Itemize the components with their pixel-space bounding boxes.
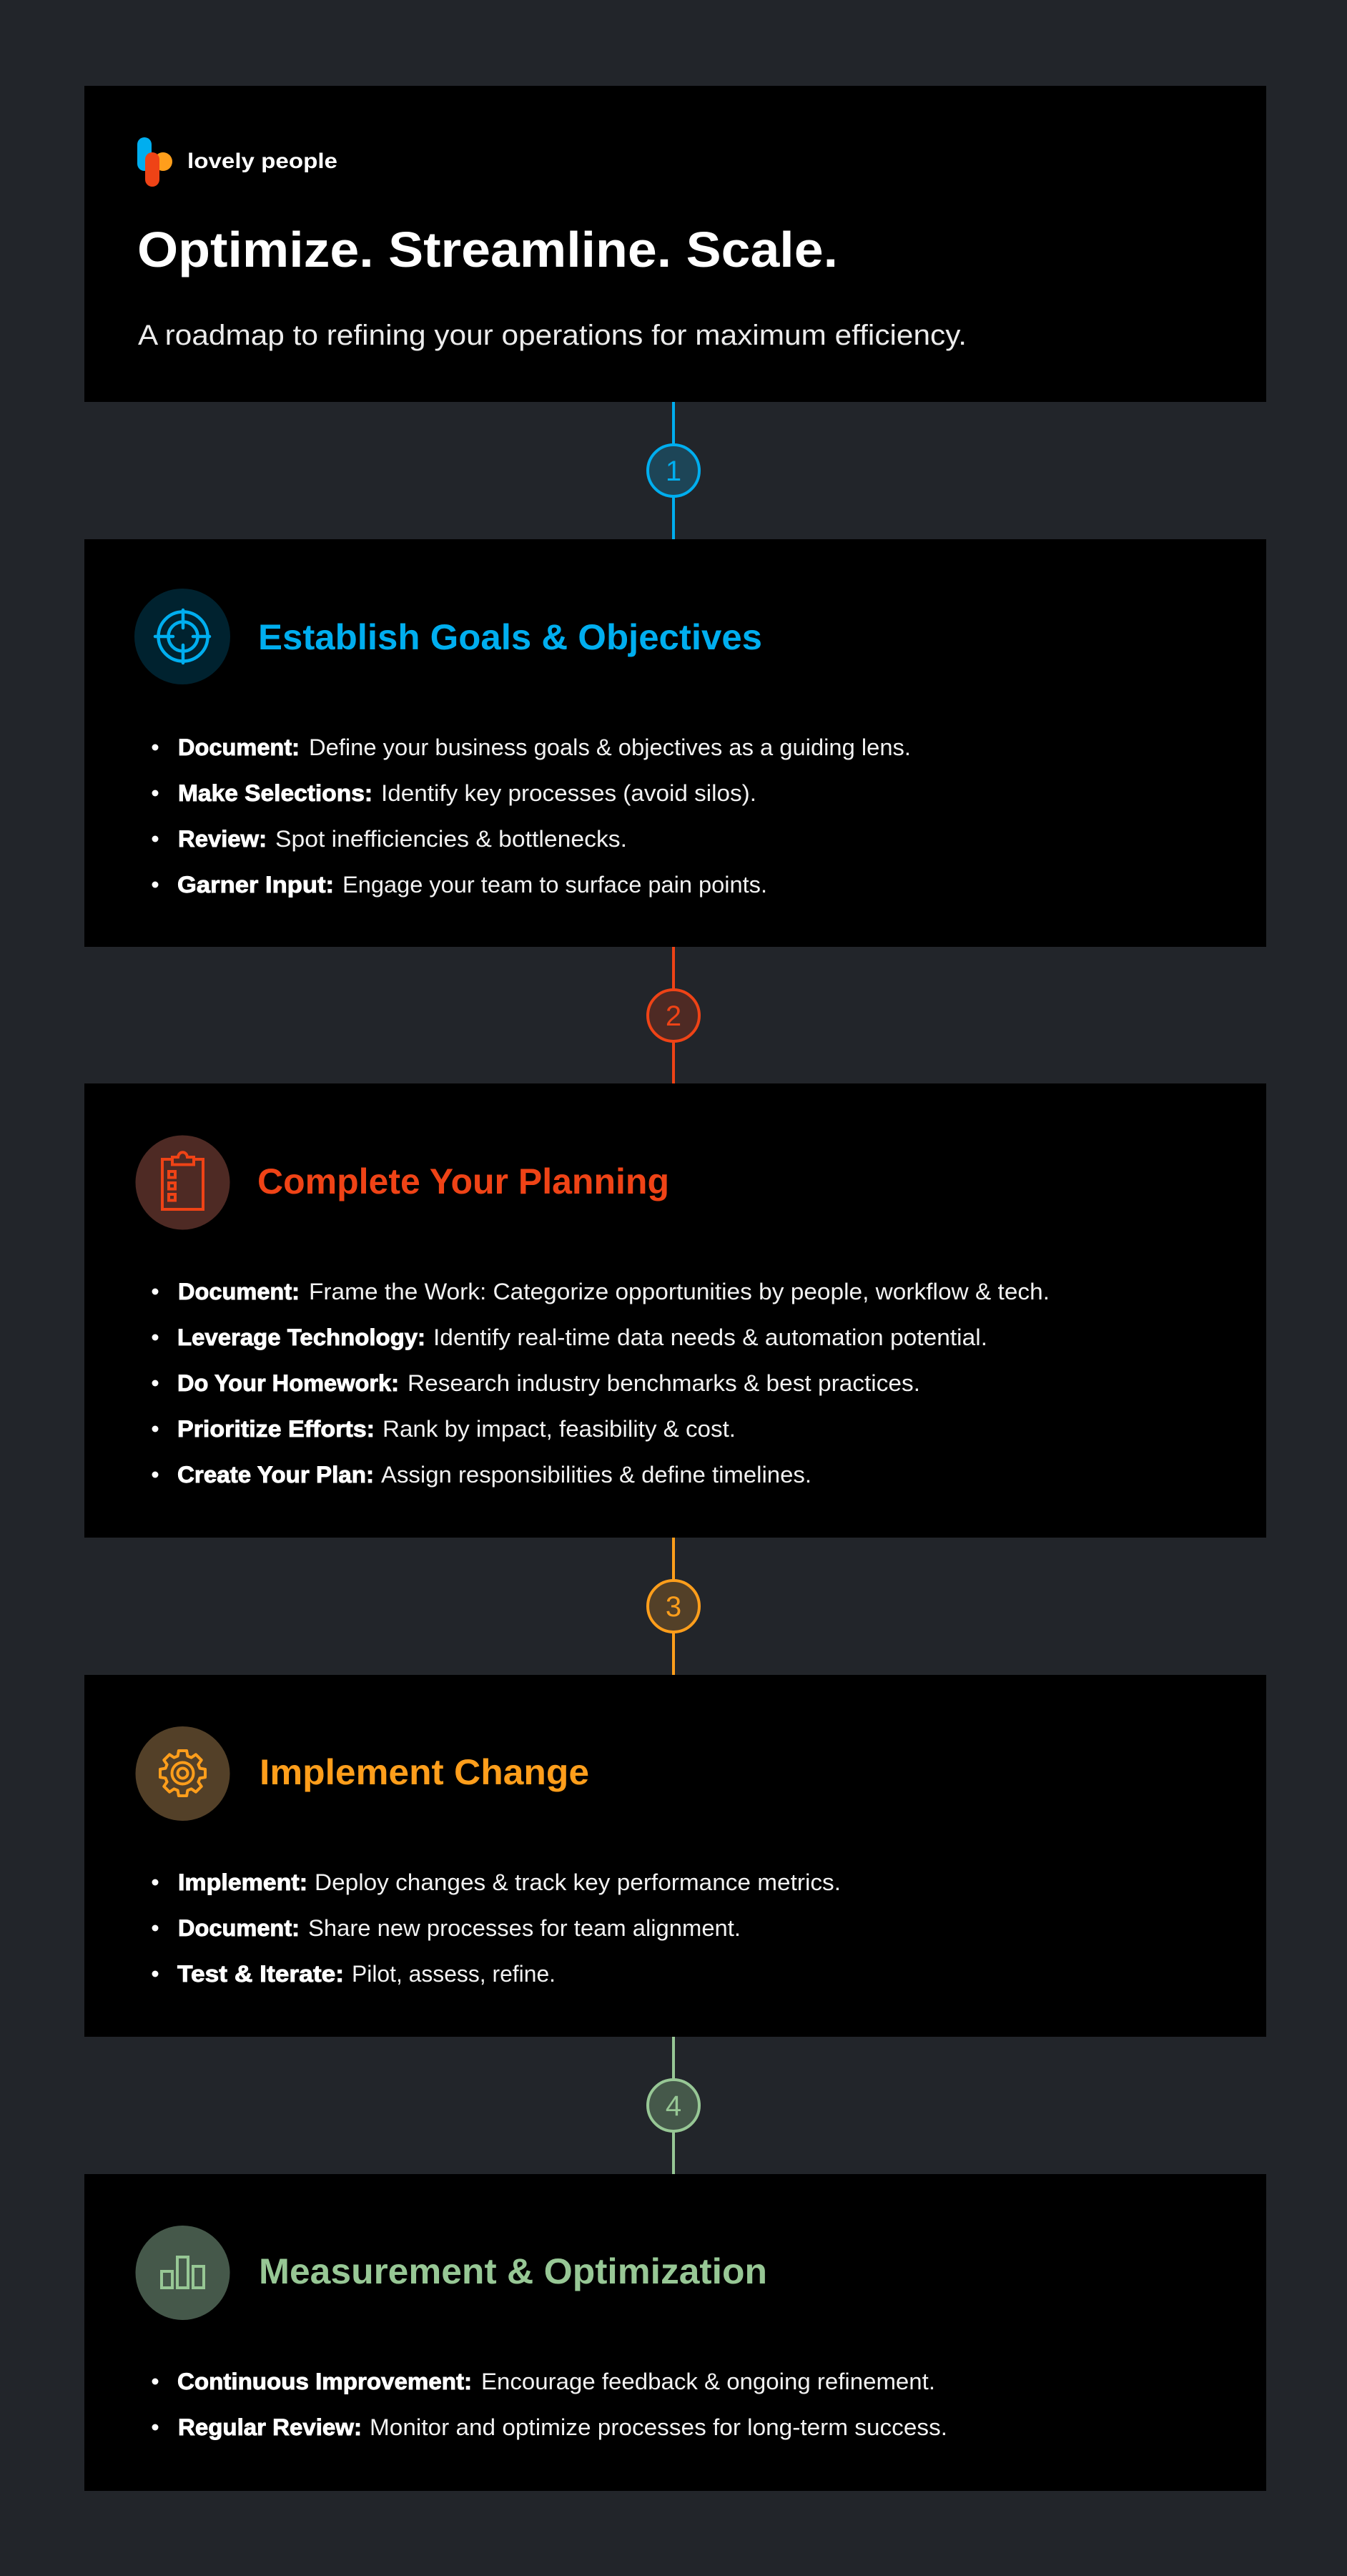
heading: Complete Your Planning [257,1161,669,1201]
bullet list: Review: [178,826,267,852]
bullet list: Implement: [178,1869,307,1895]
bullet list [152,2369,947,2440]
bullet list: Document: [178,1915,300,1941]
bullet list: Engage your team to surface pain points. [342,872,767,898]
bullet list: Leverage Technology: [177,1324,425,1350]
bullet list: Identify key processes (avoid silos). [381,780,756,806]
bullet list: Spot inefficiencies & bottlenecks. [275,826,627,852]
icon: gear [136,1726,230,1821]
bullet list: Pilot, assess, refine. [352,1961,556,1987]
subtitle: A roadmap to refining your operations for maximum efficiency. [138,320,967,351]
panel: measurement and optimization [84,2174,1266,2491]
bullet list: Document: [178,734,300,760]
bullet list: Continuous Improvement: [177,2369,472,2394]
bullet list: Encourage feedback & ongoing refinement. [481,2369,935,2394]
bullet list: Assign responsibilities & define timelines. [381,1462,811,1488]
connector: step 3: 3 [666,1591,681,1623]
title: Optimize. Streamline. Scale. [137,222,838,277]
panel: complete planning [84,1083,1266,1538]
icon: target [134,589,230,684]
bullet list: Research industry benchmarks & best practices. [408,1370,920,1396]
icon: clipboard [136,1136,230,1230]
bullet list [152,1869,841,1987]
heading: Establish Goals & Objectives [258,617,762,657]
bullet list: Regular Review: [178,2414,362,2440]
bullet list: Frame the Work: Categorize opportunities by people, workflow & tech. [309,1279,1050,1304]
bullet list [152,734,911,898]
bullet list: Define your business goals & objectives as a guiding lens. [309,734,911,760]
connector: step 4: 4 [666,2090,681,2122]
bullet list: Garner Input: [177,872,334,898]
bullet list: Deploy changes & track key performance metrics. [315,1869,841,1895]
panel: header [84,86,1266,402]
bullet list [152,1279,1050,1488]
logo: lovely people [187,149,337,173]
bullet list: Document: [178,1279,300,1304]
logo [137,137,337,187]
connector: step 1: 1 [666,456,681,487]
connector: step 2 [648,947,699,1083]
connector: step 4 [648,2037,699,2174]
bullet list: Test & Iterate: [177,1961,344,1987]
heading: Measurement & Optimization [259,2251,767,2291]
panel: establish goals [84,539,1266,947]
connector: step 1 [648,402,699,539]
bullet list: Prioritize Efforts: [177,1416,375,1442]
bullet list: Do Your Homework: [177,1370,399,1396]
bullet list: Identify real-time data needs & automation potential. [433,1324,987,1350]
connector: step 3 [648,1538,699,1675]
bullet list: Monitor and optimize processes for long-term success. [370,2414,947,2440]
connector: step 2: 2 [666,1001,681,1032]
bullet list: Make Selections: [178,780,372,806]
panel: implement change [84,1675,1266,2037]
bullet list: Create Your Plan: [177,1462,374,1488]
icon: bar chart [136,2226,230,2320]
bullet list: Share new processes for team alignment. [308,1915,741,1941]
heading: Implement Change [260,1752,589,1792]
bullet list: Rank by impact, feasibility & cost. [383,1416,736,1442]
